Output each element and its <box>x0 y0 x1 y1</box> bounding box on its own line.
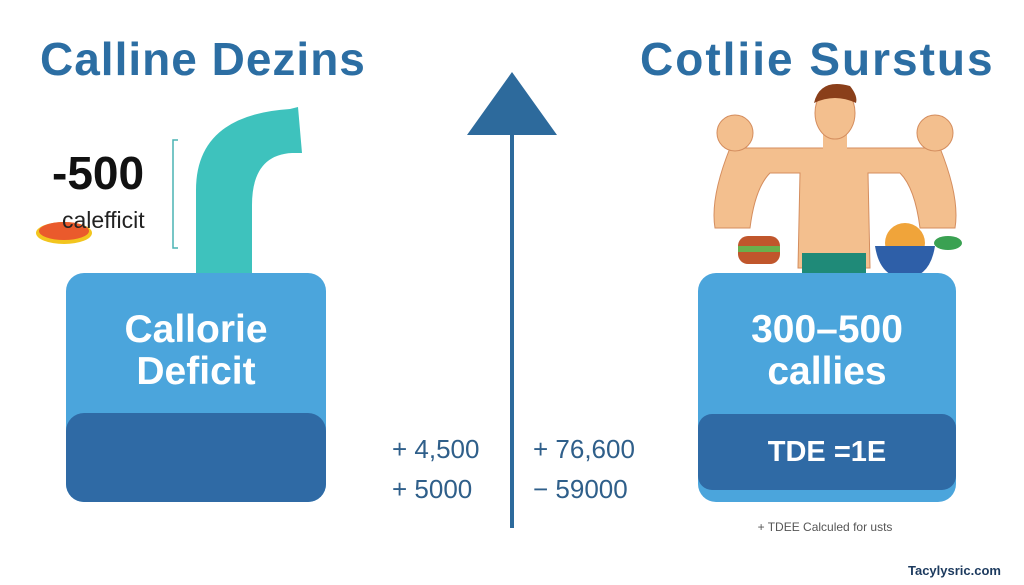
box title <box>124 308 268 393</box>
numbers right: − 59000 <box>533 474 628 504</box>
bracket <box>172 139 178 249</box>
deficit number: -500 <box>52 147 144 199</box>
box value: callies <box>767 350 887 393</box>
watermark: Tacylysric.com <box>908 563 1001 578</box>
panel: right box <box>698 273 956 502</box>
TDEE band <box>698 414 956 490</box>
numbers left: + 4,500 <box>392 434 479 464</box>
arrow <box>467 72 557 528</box>
numbers left: + 5000 <box>392 474 472 504</box>
numbers left <box>392 434 479 504</box>
icon: food <box>36 222 92 244</box>
title: right: Cotliie Surstus <box>640 33 995 85</box>
box value: 300–500 <box>751 308 903 351</box>
numbers right: + 76,600 <box>533 434 635 464</box>
footnote: + TDEE Calculed for usts <box>758 520 892 534</box>
box title: Callorie <box>124 308 268 351</box>
pipe icon <box>196 107 302 273</box>
box value <box>751 308 903 393</box>
panel: left box <box>66 273 326 502</box>
bottom band <box>66 413 326 502</box>
title: left: Calline Dezins <box>40 33 366 85</box>
TDEE band: TDE =1E <box>768 436 886 468</box>
box title: Deficit <box>136 350 256 393</box>
figure: man with food <box>714 84 962 273</box>
numbers right <box>533 434 635 504</box>
deficit label: calefficit <box>62 207 145 233</box>
